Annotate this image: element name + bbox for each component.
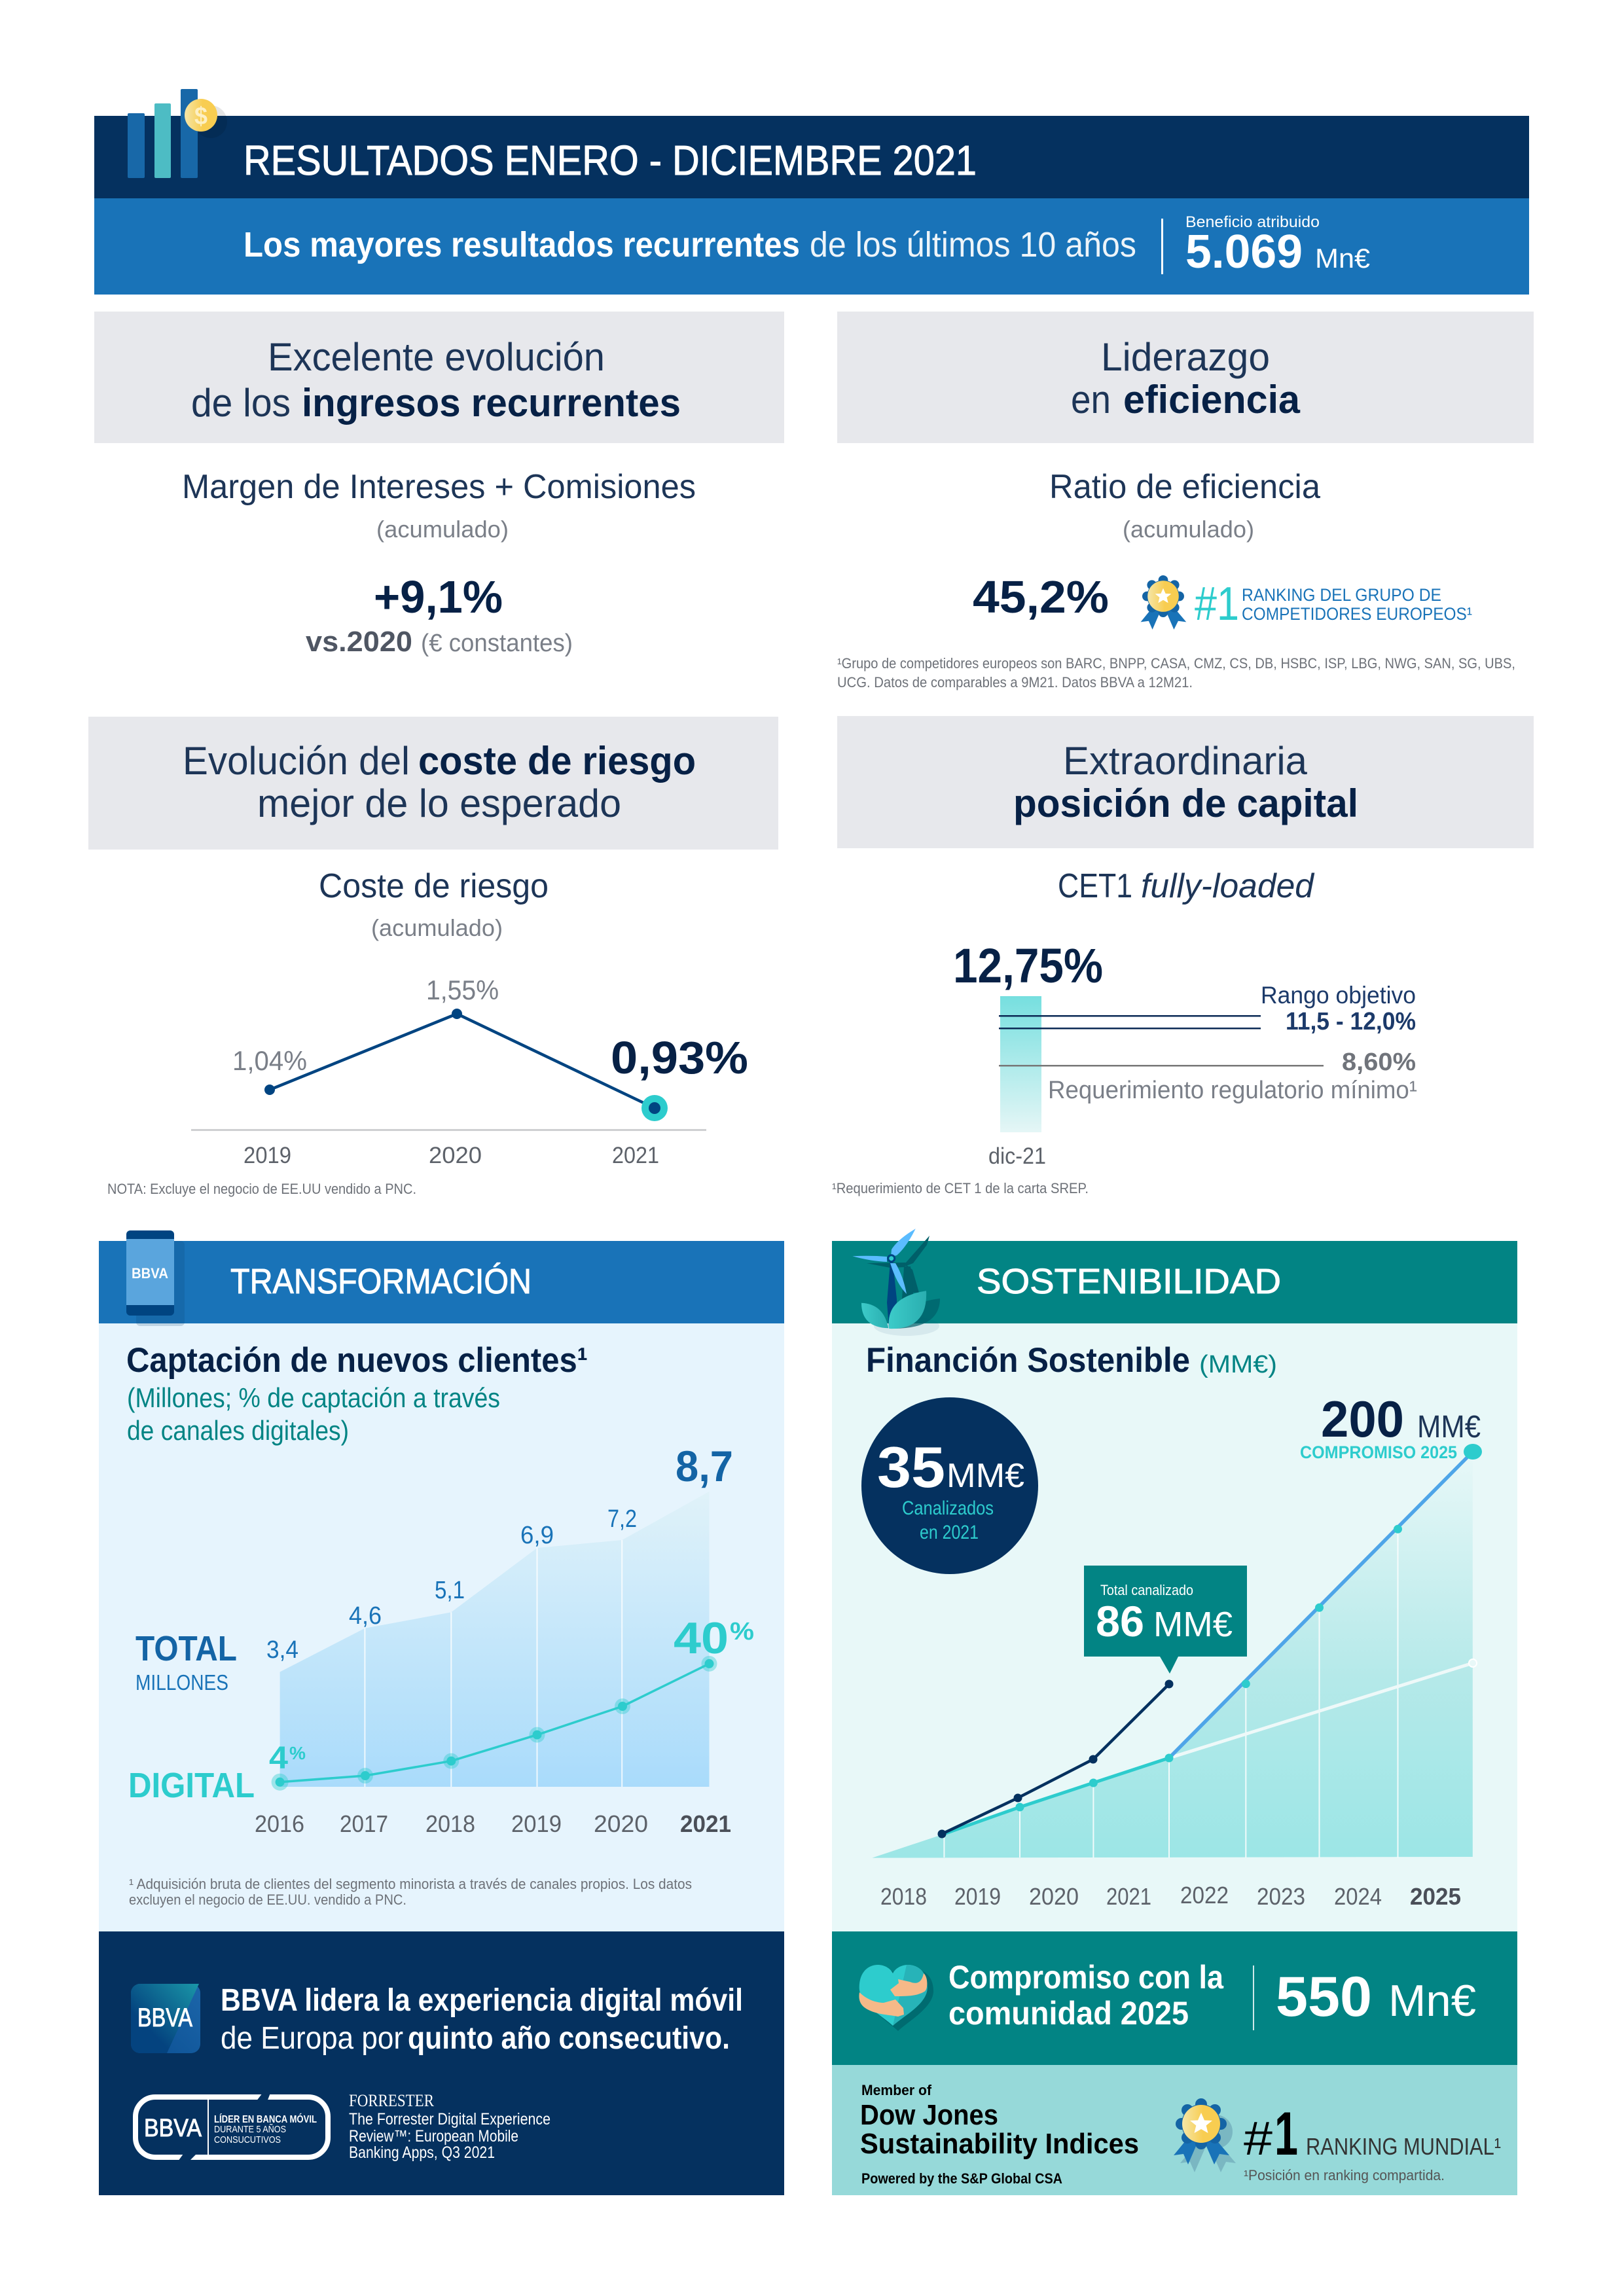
ranking: COMPETIDORES EUROPEOS¹ (1242, 604, 1472, 624)
line chart: cost of risk: 2019 (244, 1143, 291, 1168)
ranking: ¹Posición en ranking compartida. (1244, 2167, 1445, 2183)
Dow Jones logo text: Powered by the S&P Global CSA (861, 2170, 1062, 2187)
footnote: UCG. Datos de comparables a 9M21. Datos BBVA a 12M21. (837, 674, 1193, 691)
area chart: new clients: 2016 (255, 1810, 304, 1837)
area chart: new clients: 8,7 (676, 1442, 733, 1490)
title: RESULTADOS ENERO - DICIEMBRE 2021 (244, 137, 977, 184)
icon: heart with hands (859, 1965, 933, 2031)
subtitle: de los últimos 10 años (810, 225, 1136, 264)
heading: Liderazgo (1101, 335, 1270, 379)
chart: CET1 bar (953, 939, 1417, 1169)
icon: bar chart with coin (128, 89, 227, 178)
line chart: sustainable financing: 2025 (1410, 1883, 1461, 1910)
chart: CET1 bar: 8,60% (1342, 1049, 1416, 1076)
area chart: new clients: 5,1 (435, 1577, 465, 1604)
panel: compromiso con la comunidad (832, 1931, 1517, 2065)
area chart: new clients: 3,4 (266, 1636, 298, 1664)
chart title (126, 1341, 588, 1446)
metric note: (acumulado) (1123, 516, 1254, 543)
Forrester reference: FORRESTER (349, 2091, 435, 2110)
footnote: ¹Grupo de competidores europeos son BARC, BNPP, CASA, CMZ, CS, DB, HSBC, ISP, LBG, NWG, SAN, SG, UBS, (837, 655, 1515, 672)
heading: mejor de lo esperado (257, 781, 621, 825)
line chart: cost of risk: 1,55% (426, 975, 499, 1005)
heading (1071, 335, 1301, 422)
ranking: 1 (1274, 2099, 1298, 2168)
icon: bar chart with coin: $ (194, 103, 208, 130)
statement: Compromiso con la (948, 1959, 1224, 1996)
metric comparison: (€ constantes) (421, 630, 573, 657)
callout: 35 MM€: en 2021 (920, 1522, 979, 1543)
chart title: Captación de nuevos clientes¹ (126, 1341, 588, 1380)
subtitle: Los mayores resultados recurrentes (244, 225, 800, 264)
line chart: sustainable financing: 2024 (1334, 1883, 1382, 1910)
profit figure (1185, 213, 1370, 278)
line chart: cost of risk: 1,04% (232, 1045, 307, 1076)
metric note: (acumulado) (376, 516, 509, 543)
Forrester reference: Banking Apps, Q3 2021 (349, 2144, 495, 2162)
Forrester reference: The Forrester Digital Experience (349, 2110, 550, 2128)
heading: de los (191, 381, 291, 425)
line chart: cost of risk: 2021 (612, 1143, 659, 1168)
metric title: Coste de riesgo (319, 867, 549, 905)
metric title: Margen de Intereses + Comisiones (182, 468, 696, 506)
ranking (1195, 578, 1472, 630)
subtitle (244, 225, 1136, 264)
callout: total canalizado: MM€ (1153, 1605, 1233, 1644)
heading: Extraordinaria (1063, 739, 1308, 783)
chart: CET1 bar: 12,75% (953, 939, 1103, 993)
line chart: cost of risk: 2020 (429, 1143, 482, 1168)
Dow Jones logo text (860, 2082, 1139, 2187)
figure: 550 Mn€: Mn€ (1388, 1976, 1476, 2026)
metric title: fully-loaded (1141, 867, 1315, 905)
line chart: sustainable financing: 2023 (1257, 1883, 1305, 1910)
ranking: RANKING DEL GRUPO DE (1242, 585, 1441, 605)
statement: BBVA lidera la experiencia digital móvil (221, 1983, 743, 2018)
heading: Evolución del (183, 739, 410, 783)
callout: 35 MM€: MM€ (947, 1457, 1024, 1495)
chart title: (Millones; % de captación a través (127, 1382, 500, 1413)
line chart: sustainable financing: 2020 (1029, 1883, 1079, 1910)
chart title: de canales digitales) (127, 1415, 349, 1446)
chart title: (MM€) (1199, 1351, 1277, 1378)
heading (183, 739, 696, 825)
ranking (1244, 2099, 1501, 2183)
heading: Excelente evolución (268, 335, 605, 379)
panel: sostenibilidad (832, 1229, 1517, 1931)
icon: phone (126, 1230, 185, 1326)
panel: ingresos recurrentes (94, 312, 784, 658)
footnote (837, 655, 1515, 691)
area chart: new clients: DIGITAL (128, 1766, 255, 1805)
area chart: new clients: 4 (269, 1741, 288, 1776)
profit figure: Beneficio atribuido (1185, 213, 1320, 231)
area chart: new clients: 2018 (425, 1810, 475, 1837)
area chart: new clients: % (730, 1618, 754, 1645)
panel: Dow Jones ranking (832, 2065, 1517, 2195)
heading (1013, 739, 1358, 825)
chart title: Financión Sostenible (866, 1341, 1190, 1380)
panel heading: TRANSFORMACIÓN (230, 1262, 532, 1301)
metric title (1058, 867, 1315, 905)
area chart: new clients: % (289, 1743, 306, 1763)
metric value: +9,1% (374, 571, 503, 622)
footnote: excluyen el negocio de EE.UU. vendido a PNC. (129, 1892, 406, 1908)
icon: wind turbine and leaves (852, 1229, 940, 1336)
panel: header (94, 89, 1529, 295)
callout: total canalizado: 86 (1096, 1597, 1144, 1645)
badge: líder en banca móvil: CONSUCUTIVOS (214, 2134, 281, 2145)
area chart: new clients: 2021 (680, 1810, 731, 1837)
ranking: RANKING MUNDIAL¹ (1306, 2133, 1501, 2160)
metric title: Ratio de eficiencia (1049, 468, 1320, 506)
ranking: #1 (1195, 578, 1239, 630)
panel: capital (832, 716, 1534, 1196)
area chart: new clients: 40 (674, 1613, 729, 1663)
footnote (129, 1876, 692, 1908)
panel: transformación (99, 1230, 784, 1931)
line chart: sustainable financing: 2021 (1106, 1883, 1151, 1910)
area chart: new clients: 7,2 (607, 1505, 637, 1533)
line chart: sustainable financing: 2018 (880, 1883, 927, 1910)
line chart: cost of risk (191, 975, 748, 1168)
metric note: (acumulado) (371, 914, 503, 941)
panel: coste de riesgo (88, 717, 778, 1197)
statement (948, 1959, 1224, 2032)
figure: 550 Mn€: 550 (1276, 1965, 1372, 2028)
footnote: ¹ Adquisición bruta de clientes del segmento minorista a través de canales propios. Los datos (129, 1876, 692, 1892)
icon: award ribbon (1141, 575, 1186, 630)
chart: CET1 bar: Requerimiento regulatorio mínimo¹ (1048, 1077, 1417, 1104)
area chart: new clients: 2020 (594, 1810, 648, 1837)
callout: 35 MM€: Canalizados (902, 1498, 994, 1519)
line chart: sustainable financing: 200 (1321, 1390, 1404, 1448)
icon: BBVA app (131, 1984, 200, 2053)
Forrester reference (349, 2091, 550, 2162)
line chart: sustainable financing (872, 1390, 1482, 1910)
panel: BBVA digital leadership (99, 1931, 784, 2195)
panel: eficiencia (837, 312, 1534, 691)
callout: total canalizado: Total canalizado (1100, 1582, 1193, 1598)
callout: total canalizado (1084, 1566, 1247, 1674)
badge: líder en banca móvil: LÍDER EN BANCA MÓVIL (214, 2113, 317, 2125)
area chart: new clients: 2017 (340, 1810, 388, 1837)
heading: eficiencia (1123, 378, 1301, 422)
metric title: CET1 (1058, 867, 1132, 905)
area chart: new clients (128, 1442, 754, 1837)
line chart: sustainable financing: 2019 (954, 1883, 1001, 1910)
area chart: new clients: TOTAL (135, 1629, 237, 1668)
icon: BBVA app: BBVA (137, 2003, 192, 2032)
profit figure: Mn€ (1315, 243, 1370, 274)
line chart: sustainable financing: 2022 (1180, 1882, 1229, 1909)
icon: award ribbon (1174, 2098, 1236, 2172)
callout: 35 MM€ (861, 1397, 1038, 1574)
metric value: 45,2% (973, 571, 1109, 622)
line chart: sustainable financing: COMPROMISO 2025 (1300, 1443, 1457, 1462)
figure: 550 Mn€ (1276, 1965, 1476, 2028)
statement: comunidad 2025 (948, 1995, 1189, 2032)
statement (221, 1983, 743, 2056)
statement: de Europa por (221, 2021, 403, 2056)
metric comparison: vs.2020 (306, 626, 412, 658)
heading (191, 335, 681, 425)
area chart: new clients: 6,9 (520, 1522, 554, 1549)
statement: quinto año consecutivo. (408, 2021, 730, 2056)
Dow Jones logo text: Member of (861, 2082, 932, 2098)
callout: 35 MM€: 35 (877, 1435, 945, 1499)
chart: CET1 bar: 11,5 - 12,0% (1286, 1008, 1416, 1035)
badge: líder en banca móvil (135, 2093, 328, 2161)
area chart: new clients: 2019 (511, 1810, 562, 1837)
line chart: sustainable financing: MM€ (1417, 1410, 1481, 1444)
panel heading: SOSTENIBILIDAD (977, 1262, 1281, 1301)
footnote: ¹Requerimiento de CET 1 de la carta SREP. (832, 1180, 1089, 1196)
chart: CET1 bar: dic-21 (988, 1143, 1046, 1169)
heading: coste de riesgo (418, 739, 696, 783)
chart: CET1 bar: Rango objetivo (1261, 982, 1416, 1009)
profit figure: 5.069 (1185, 226, 1303, 278)
area chart: new clients: MILLONES (135, 1670, 228, 1695)
Dow Jones logo text: Sustainability Indices (860, 2128, 1139, 2160)
ranking: # (1244, 2113, 1272, 2165)
area chart: new clients: 4,6 (349, 1602, 382, 1630)
badge: líder en banca móvil: DURANTE 5 AÑOS (214, 2124, 286, 2135)
heading: ingresos recurrentes (302, 381, 681, 425)
heading: en (1071, 378, 1111, 422)
metric comparison (306, 626, 573, 658)
badge: líder en banca móvil: BBVA (144, 2115, 202, 2142)
Dow Jones logo text: Dow Jones (860, 2099, 998, 2131)
Forrester reference: Review™: European Mobile (349, 2127, 518, 2145)
footnote: NOTA: Excluye el negocio de EE.UU vendido a PNC. (107, 1181, 416, 1197)
icon: phone: BBVA (132, 1265, 168, 1282)
heading: posición de capital (1013, 781, 1358, 825)
line chart: cost of risk: 0,93% (611, 1032, 748, 1083)
